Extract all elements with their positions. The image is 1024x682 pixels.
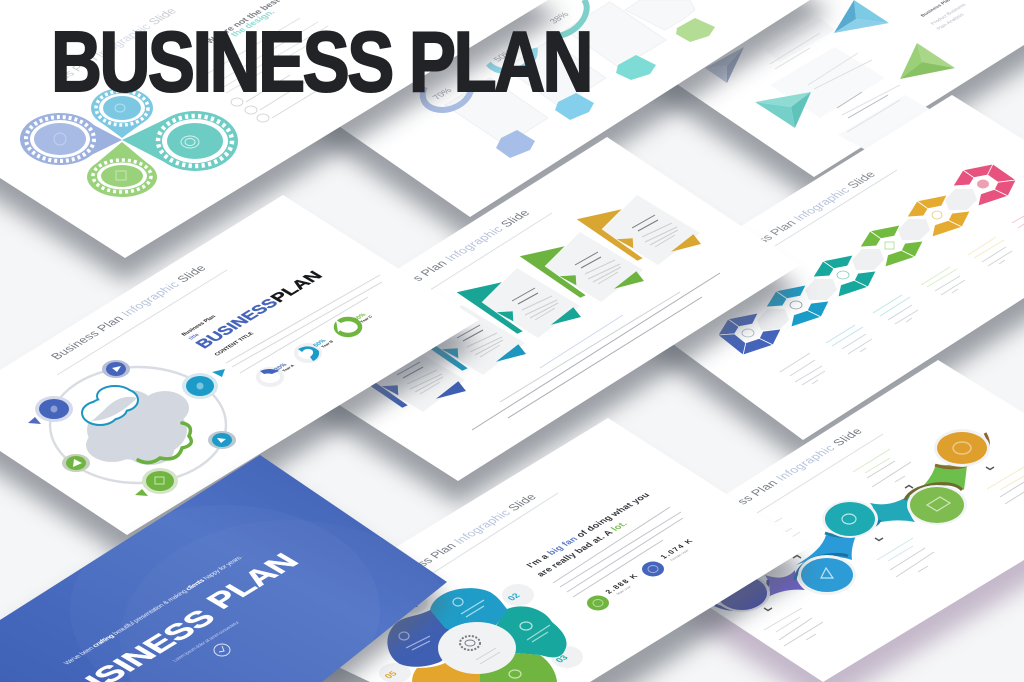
node: purple: [714, 574, 770, 612]
triangle labels: [920, 0, 968, 31]
stat: blue: 1.074 K: [658, 537, 695, 560]
content heading: Business Plan: [181, 314, 218, 337]
hex ring: teal: [813, 255, 876, 297]
slide: blue cover: [0, 455, 460, 682]
card: 38%: 38%: [547, 11, 571, 25]
badge: 01: 01: [407, 599, 419, 610]
grey cloud: [86, 390, 189, 465]
step: green: [520, 232, 644, 302]
arrows: [28, 369, 225, 496]
petal: green: [480, 650, 557, 682]
content heading: BUSINESS: [192, 296, 282, 351]
content heading: [181, 268, 327, 357]
icon: blue pyramid: [834, 0, 889, 33]
badge: 05: 05: [382, 670, 399, 680]
cover subline: Lorem ipsum dolor sit amet consectetur: [172, 620, 242, 663]
node: cyan: [795, 554, 856, 595]
step: indigo: [342, 342, 466, 412]
stat: blue: Female User: [669, 549, 691, 562]
card: 50%: [482, 31, 606, 120]
connector: cyan: [796, 528, 860, 565]
chevrons: [764, 467, 994, 610]
hex captions: [780, 216, 1024, 385]
donut: 20%: [258, 362, 295, 385]
badge: 02: [502, 584, 534, 606]
node: green small: [62, 454, 90, 472]
slide title: ss Plan Infographic Slide: [414, 492, 540, 569]
node: blue large: [35, 396, 73, 422]
badge: 03: 03: [553, 654, 570, 664]
node: green large: [142, 468, 178, 494]
content heading: title: [188, 333, 201, 341]
node: blue small: [102, 360, 130, 378]
node: cyan large: [182, 373, 218, 399]
node: cyan small: [208, 431, 236, 449]
gear petal: teal: [122, 111, 238, 171]
subtitle line: [433, 493, 558, 573]
slide: cloud cycle: [0, 195, 479, 559]
gear petal: green: [87, 142, 157, 197]
cover decorative circles: [120, 520, 380, 682]
heading: are really bad at. A lot.: [534, 520, 629, 578]
step: yellow: [577, 195, 701, 265]
subtitle line: [57, 270, 227, 375]
slide: hexagon chain: [617, 95, 1024, 464]
donut: 50%: [296, 338, 335, 361]
icon: green pyramid: [900, 43, 955, 79]
slide: gears: [0, 0, 560, 282]
hex ring: cyan: [766, 285, 829, 327]
content heading: PLAN: [266, 268, 327, 305]
triangle labels: Product Business: [930, 3, 968, 26]
card: green shield: [625, 0, 715, 42]
petal: cyan: [430, 588, 508, 645]
slide title: ss Plan Infographic Slide: [754, 169, 879, 246]
connector hexes: [757, 189, 977, 330]
badge: 02: 02: [505, 592, 522, 602]
slide title: Business Plan Infographic Slide: [48, 263, 210, 362]
cycle ring: [50, 367, 226, 483]
slide title: ss Plan Infographic Slide: [404, 207, 533, 287]
cover title: [44, 549, 306, 682]
connector: green: [907, 456, 968, 498]
card: 38%: [531, 0, 666, 80]
green cloud outline: [138, 423, 191, 463]
node: yellow: [934, 429, 990, 468]
slide title fragment: ss Plan Infographic Slide: [56, 6, 180, 82]
petal: indigo: [387, 610, 470, 667]
gear petal: sky blue: [91, 88, 153, 138]
petal: yellow: [412, 660, 490, 682]
hex ring: blue: [718, 313, 781, 355]
badge: 01: [398, 593, 428, 613]
stat: green: [587, 572, 640, 610]
card: 70%: [417, 66, 548, 158]
content heading: CONTENT TITLE: [214, 331, 256, 357]
slide: path timeline: [630, 360, 1024, 682]
teal cloud outline: [83, 387, 137, 424]
gear petal: blue: [20, 113, 122, 165]
heading: the design.: [228, 8, 277, 38]
subtitle line: [775, 170, 897, 246]
node: teal: [822, 500, 880, 538]
paragraph lines: [553, 507, 683, 597]
cover tagline: We've been crafting beautiful presentation & making clients happy for years.: [63, 555, 245, 666]
captions: [760, 449, 1024, 646]
slide: flower: [260, 418, 809, 682]
donut: 50%: Year B: [320, 339, 335, 349]
slide: triangles: [553, 0, 1024, 201]
connector: teal: [870, 495, 915, 524]
petal: teal: [480, 606, 567, 657]
heading: I'm a big fan of doing what you: [524, 491, 652, 569]
triangle labels: Plan Analysis: [936, 12, 966, 31]
petal icons: [399, 598, 550, 678]
stat: blue: [642, 537, 695, 576]
badge: 03: [551, 646, 583, 668]
slide: stepped cards: [261, 137, 800, 505]
donut: 80%: [336, 312, 374, 335]
text lines: [200, 18, 330, 93]
stat: green: Male User: [615, 585, 633, 596]
step description lines: [472, 273, 720, 430]
icon: clock: [214, 644, 230, 656]
main title: BUSINESS PLAN: [51, 15, 591, 110]
donut: 50%: 50%: [313, 338, 329, 348]
cover title: PLAN: [200, 549, 306, 614]
step: teal: [457, 268, 581, 338]
donut: 20%: Year A: [281, 364, 295, 373]
card: 50%: 50%: [491, 49, 515, 63]
subtitle line: [427, 213, 552, 292]
check list: [231, 75, 318, 122]
step: cyan: [402, 305, 526, 375]
icon: grey pyramid: [705, 47, 744, 83]
badge: 05: [379, 663, 411, 682]
hex ring: green: [860, 225, 923, 267]
donut: 80%: Year C: [359, 314, 374, 324]
slide title: ss Plan Infographic Slide: [734, 426, 866, 507]
connector: purple: [765, 570, 805, 597]
stat: green: 2.888 K: [603, 572, 640, 595]
subtitle line: [757, 434, 883, 513]
icon: teal pyramid: [755, 92, 811, 128]
donut: 80%: 80%: [353, 312, 369, 322]
slide: percentage cards: [150, 0, 830, 241]
body lines: [226, 275, 382, 373]
donut: 20%: 20%: [274, 362, 290, 372]
node: green: [905, 484, 967, 525]
flower centre: [438, 622, 516, 674]
card: 70%: 70%: [430, 87, 454, 101]
hex ring: yellow: [907, 195, 970, 237]
hex ring: pink: [953, 164, 1016, 206]
